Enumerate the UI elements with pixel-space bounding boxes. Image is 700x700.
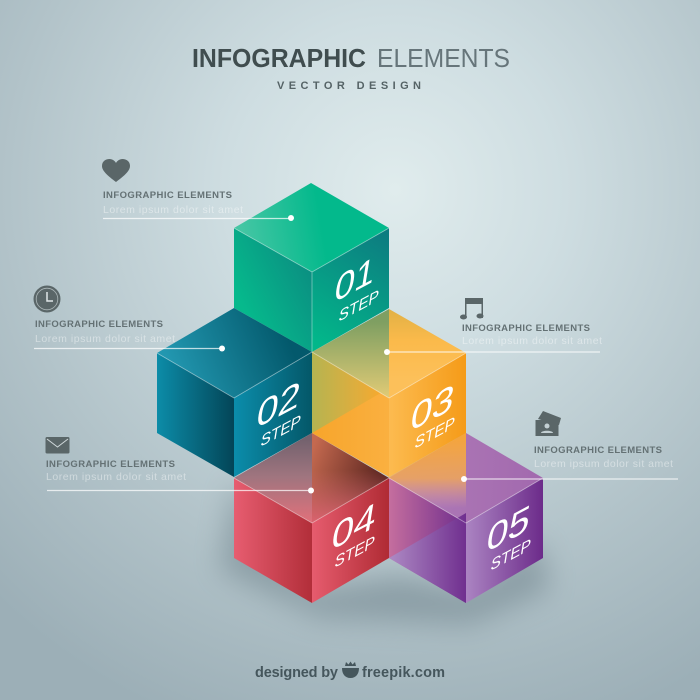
callout heading: INFOGRAPHIC ELEMENTS	[35, 319, 163, 330]
step label 05: STEP	[489, 534, 533, 575]
callout 03	[384, 298, 602, 355]
callout text: Lorem ipsum dolor sit amet	[46, 471, 186, 483]
callout heading: INFOGRAPHIC ELEMENTS	[46, 459, 175, 470]
callout 02	[34, 286, 225, 352]
icon: freepik crown	[342, 662, 359, 678]
callout text: Lorem ipsum dolor sit amet	[35, 333, 175, 345]
icon: envelope	[46, 437, 70, 454]
step label 03: 03	[408, 376, 457, 441]
leader line	[461, 476, 678, 482]
leader line	[384, 349, 600, 355]
callout text: Lorem ipsum dolor sit amet	[462, 335, 602, 347]
step label 02: 02	[254, 373, 303, 438]
footer credit	[255, 662, 445, 681]
leader line	[34, 346, 225, 352]
step label 01: STEP	[337, 285, 381, 326]
step label 04: STEP	[333, 531, 377, 572]
icon: photo id	[536, 411, 561, 436]
callout heading: INFOGRAPHIC ELEMENTS	[103, 190, 232, 201]
cube 01 green	[234, 183, 389, 352]
title: INFOGRAPHIC	[192, 45, 366, 73]
cube 04 red	[234, 433, 389, 603]
icon: heart	[102, 159, 130, 182]
footer credit: designed by	[255, 665, 338, 681]
cube 03 orange	[312, 309, 466, 477]
leader line	[103, 215, 294, 221]
icon: clock	[34, 286, 60, 312]
callout 01	[102, 159, 294, 221]
title: ELEMENTS	[377, 45, 510, 73]
step label 01: 01	[332, 249, 378, 312]
icon: music note	[460, 298, 484, 320]
cube 05 purple	[389, 433, 543, 603]
callout 04	[46, 437, 314, 494]
callout text: Lorem ipsum dolor sit amet	[534, 458, 673, 470]
footer credit: freepik.com	[362, 665, 445, 681]
subtitle: VECTOR DESIGN	[277, 80, 421, 92]
cube 02 teal	[157, 308, 312, 477]
leader line	[47, 488, 314, 494]
step label 04: 04	[329, 494, 379, 560]
callout heading: INFOGRAPHIC ELEMENTS	[534, 445, 662, 456]
callout text: Lorem ipsum dolor sit amet	[103, 204, 243, 216]
step label 02: STEP	[259, 410, 303, 451]
callout 05	[461, 411, 678, 482]
step label 05: 05	[484, 497, 533, 562]
cube shadow	[220, 480, 550, 625]
step label 03: STEP	[413, 412, 457, 453]
title	[192, 45, 510, 73]
callout heading: INFOGRAPHIC ELEMENTS	[462, 323, 590, 334]
